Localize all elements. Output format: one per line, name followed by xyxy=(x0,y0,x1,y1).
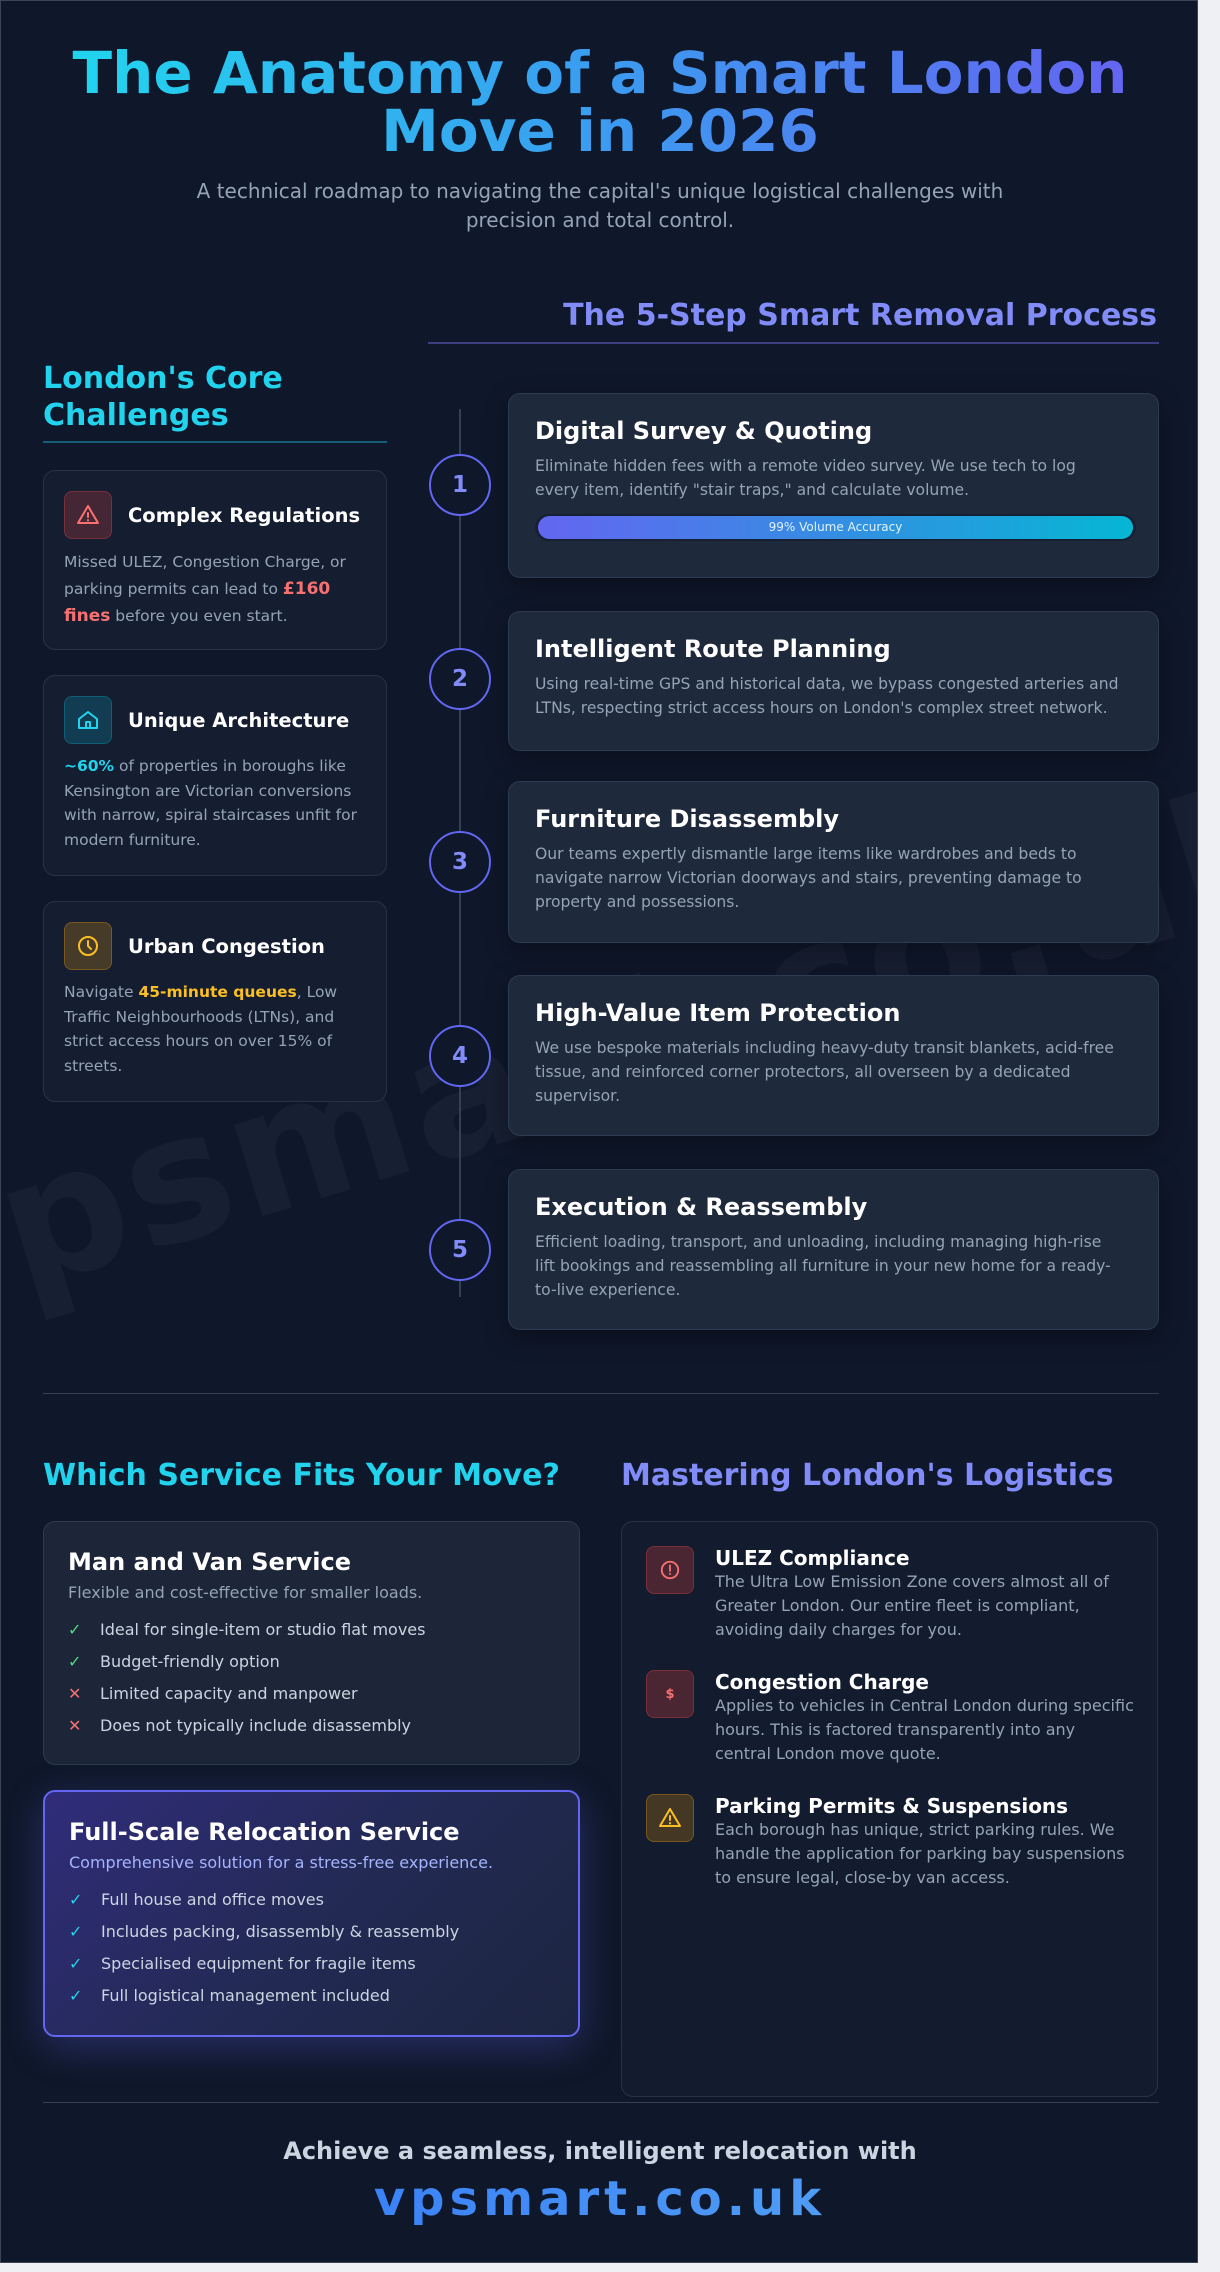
card: urban congestion xyxy=(43,901,387,1102)
card: full-scale relocation: Full logistical management included xyxy=(101,1986,390,2005)
step 3 xyxy=(508,781,1159,943)
step 1 circle: 1 xyxy=(452,472,468,498)
step 3 circle: 3 xyxy=(452,849,468,875)
card: full-scale relocation: Includes packing, disassembly & reassembly xyxy=(101,1922,459,1941)
heading: which service: Which Service Fits Your Move? xyxy=(43,1458,560,1493)
step 3: Our teams expertly dismantle large items like wardrobes and beds to navigate narrow Victorian doorways and stairs, preventing damage to property and possessions. xyxy=(535,845,1082,911)
card: complex regulations: Missed ULEZ, Congestion Charge, or parking permits can lead to £160 fines before you even start. xyxy=(64,553,346,626)
step 1: Digital Survey & Quoting xyxy=(535,417,872,445)
card: man and van: Man and Van Service xyxy=(68,1548,351,1576)
step 5 circle xyxy=(429,1219,491,1281)
card: urban congestion: Navigate 45-minute queues, Low Traffic Neighbourhoods (LTNs), and strict access hours on over 15% of streets. xyxy=(64,983,337,1074)
footer brand: vpsmart.co.uk xyxy=(374,2171,826,2227)
card: full-scale relocation: ✓ xyxy=(69,1954,82,1973)
icon: clock xyxy=(64,922,112,970)
card: full-scale relocation: Full-Scale Relocation Service xyxy=(69,1818,460,1846)
step 4: High-Value Item Protection xyxy=(535,999,900,1027)
step 5: Efficient loading, transport, and unloading, including managing high-rise lift bookings and reassembling all furniture in your new home for a ready-to-live experience. xyxy=(535,1233,1111,1299)
step 5: Execution & Reassembly xyxy=(535,1193,867,1221)
card: complex regulations: Complex Regulations xyxy=(128,504,360,526)
card: full-scale relocation: ✓ xyxy=(69,1890,82,1909)
item: parking permits xyxy=(646,1794,1125,1887)
card: man and van: Does not typically include disassembly xyxy=(100,1716,411,1735)
card: man and van: ✕ xyxy=(68,1684,81,1703)
step 2 circle xyxy=(429,648,491,710)
subtitle: A technical roadmap to navigating the capital's unique logistical challenges with precision and total control. xyxy=(197,179,1003,232)
heading: 5-step process: The 5-Step Smart Removal Process xyxy=(563,298,1157,333)
step 2 xyxy=(508,611,1159,751)
title: Move in 2026 xyxy=(381,97,819,165)
card: man and van: ✓ xyxy=(68,1620,81,1639)
step 3 circle xyxy=(429,831,491,893)
item: ULEZ xyxy=(646,1546,1110,1639)
card: full-scale relocation: ✓ xyxy=(69,1922,82,1941)
item: congestion charge: Congestion Charge xyxy=(715,1670,929,1694)
step 1 circle xyxy=(429,454,491,516)
step 2: Intelligent Route Planning xyxy=(535,635,891,663)
card: full-scale relocation: ✓ xyxy=(69,1986,82,2005)
card: man and van: Limited capacity and manpower xyxy=(100,1684,358,1703)
card: complex regulations xyxy=(43,470,387,650)
item: congestion charge: $ xyxy=(665,1686,675,1702)
step 3: Furniture Disassembly xyxy=(535,805,839,833)
step 4 xyxy=(508,975,1159,1136)
heading: mastering logistics: Mastering London's Logistics xyxy=(621,1458,1114,1493)
card: full-scale relocation: Full house and office moves xyxy=(101,1890,324,1909)
step 2 circle: 2 xyxy=(452,666,468,692)
step 1 xyxy=(508,393,1159,578)
timeline line xyxy=(459,409,461,1297)
step 4: We use bespoke materials including heavy-duty transit blankets, acid-free tissue, and reinforced corner protectors, all overseen by a dedicated supervisor. xyxy=(535,1039,1114,1105)
card: unique architecture: ~60% of properties in boroughs like Kensington are Victorian conversions with narrow, spiral staircases unfit for modern furniture. xyxy=(64,757,357,848)
item: congestion charge: Applies to vehicles in Central London during specific hours. This is factored transparently into any central London move quote. xyxy=(715,1696,1134,1763)
title xyxy=(31,44,1169,160)
card: full-scale relocation: Comprehensive solution for a stress-free experience. xyxy=(69,1853,493,1872)
card: full-scale relocation: Specialised equipment for fragile items xyxy=(101,1954,416,1973)
step 4 circle xyxy=(429,1025,491,1087)
card: full-scale relocation xyxy=(43,1790,580,2037)
progress bar: 99% Volume Accuracy xyxy=(769,520,902,534)
step 4 circle: 4 xyxy=(452,1043,468,1069)
card: man and van xyxy=(43,1521,580,1765)
item: ULEZ: The Ultra Low Emission Zone covers almost all of Greater London. Our entire fleet is compliant, avoiding daily charges for you. xyxy=(715,1572,1109,1639)
card: man and van: Flexible and cost-effective for smaller loads. xyxy=(68,1583,422,1602)
card: unique architecture xyxy=(43,675,387,876)
icon: house xyxy=(64,696,112,744)
card: man and van: ✓ xyxy=(68,1652,81,1671)
item: parking permits: Each borough has unique, strict parking rules. We handle the application for parking bay suspensions to ensure legal, close-by van access. xyxy=(715,1820,1125,1887)
item: ULEZ: ULEZ Compliance xyxy=(715,1546,910,1570)
card: man and van: ✕ xyxy=(68,1716,81,1735)
title: The Anatomy of a Smart London xyxy=(73,39,1127,107)
step 2: Using real-time GPS and historical data, we bypass congested arteries and LTNs, respecting strict access hours on London's complex street network. xyxy=(535,675,1119,717)
item: parking permits: Parking Permits & Suspensions xyxy=(715,1794,1068,1818)
step 5 xyxy=(508,1169,1159,1330)
heading: core challenges: London's Core Challenges xyxy=(43,361,283,433)
step 5 circle: 5 xyxy=(452,1237,468,1263)
icon: warning xyxy=(64,491,112,539)
step 1: Eliminate hidden fees with a remote video survey. We use tech to log every item, identify "stair traps," and calculate volume. xyxy=(535,457,1076,499)
card: urban congestion: Urban Congestion xyxy=(128,934,325,958)
footer text: Achieve a seamless, intelligent relocation with xyxy=(283,2137,917,2165)
progress bar xyxy=(535,514,1136,541)
card: unique architecture: Unique Architecture xyxy=(128,708,349,732)
item: congestion charge xyxy=(646,1670,1134,1763)
card: man and van: Budget-friendly option xyxy=(100,1652,280,1671)
panel: logistics xyxy=(621,1521,1158,2097)
card: man and van: Ideal for single-item or studio flat moves xyxy=(100,1620,425,1639)
